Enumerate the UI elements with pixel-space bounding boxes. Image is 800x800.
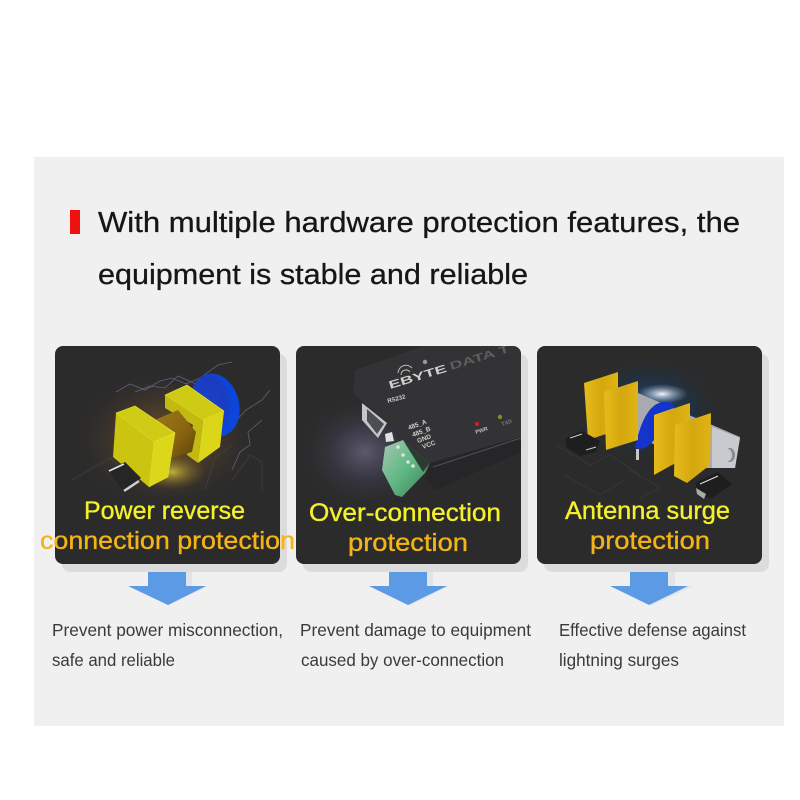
device labels: 485_A xyxy=(407,419,428,432)
description: antenna surge: Effective defense against xyxy=(559,620,746,640)
illustration: data terminal with connector xyxy=(318,346,521,497)
panel: over-connection protection xyxy=(295,343,528,572)
device labels: EBYTE xyxy=(387,363,448,392)
illustration: surge component with yellow plates xyxy=(566,370,740,499)
description: power reverse: Prevent power misconnection, xyxy=(52,620,283,640)
card title: protection xyxy=(348,529,468,557)
arrow: first column xyxy=(128,572,208,606)
description: over-connection: Prevent damage to equipment xyxy=(300,620,531,640)
card title: Power reverse xyxy=(84,497,245,525)
description: antenna surge: lightning surges xyxy=(559,650,679,670)
description: over-connection xyxy=(300,620,531,670)
arrow: second column xyxy=(369,572,449,606)
device labels: GND xyxy=(416,433,433,445)
heading text xyxy=(98,207,740,291)
heading text: With multiple hardware protection features, the xyxy=(98,207,740,239)
card title xyxy=(565,497,730,555)
device labels: VCC xyxy=(421,440,437,451)
card title: protection xyxy=(590,527,710,555)
device labels: TXD xyxy=(501,419,513,428)
description: antenna surge xyxy=(559,620,746,670)
card title: Antenna surge xyxy=(565,497,730,525)
device labels: RS232 xyxy=(387,394,407,405)
device labels: PWR xyxy=(475,426,489,436)
card title xyxy=(40,497,295,555)
card title xyxy=(309,499,501,557)
device labels: 485_B xyxy=(411,426,432,439)
description: over-connection: caused by over-connection xyxy=(301,650,504,670)
heading text: equipment is stable and reliable xyxy=(98,259,528,291)
description: power reverse: safe and reliable xyxy=(52,650,175,670)
card title: Over-connection xyxy=(309,499,501,527)
background panel xyxy=(34,157,784,726)
description: power reverse xyxy=(52,620,283,670)
device labels xyxy=(387,343,513,451)
panel: power reverse connection protection xyxy=(40,346,295,572)
card title: connection protection xyxy=(40,527,295,555)
heading xyxy=(70,207,740,291)
illustration: inductor with lightning xyxy=(72,362,270,492)
panel: antenna surge protection xyxy=(537,346,769,572)
heading marker xyxy=(70,210,80,234)
arrow: third column xyxy=(610,572,694,606)
device labels: DATA T xyxy=(448,343,512,373)
